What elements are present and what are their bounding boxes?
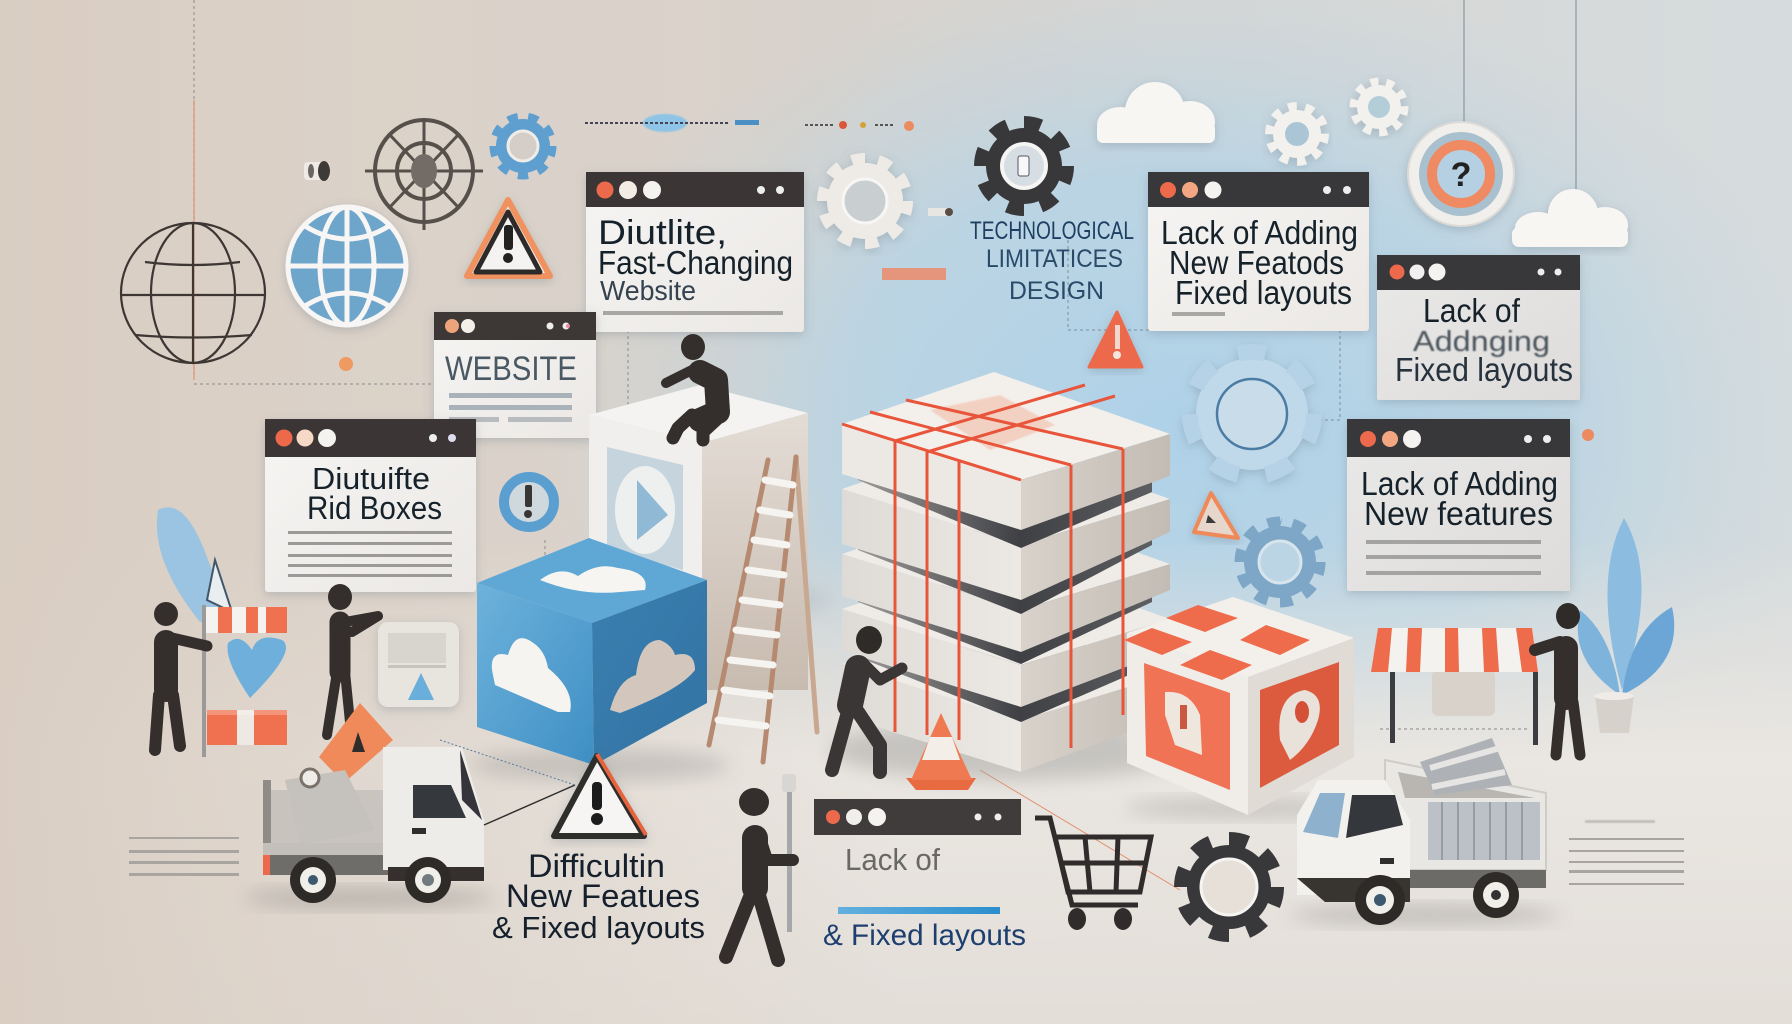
hanging strings — [1464, 0, 1576, 190]
icon: small lock — [304, 161, 330, 181]
window: lack of adding new featods: New Featods — [1169, 244, 1344, 281]
window: lack of bar with fixed layouts — [814, 799, 1026, 952]
heading: technological limitations design: DESIGN — [1009, 277, 1104, 305]
icon: large light blue gear — [1190, 352, 1314, 476]
slab 3 — [842, 502, 1170, 652]
icon: cloud right — [1512, 189, 1628, 247]
strapped stack of slabs — [830, 372, 1190, 780]
window: lack of adding new features: Lack of Adding — [1361, 465, 1558, 502]
window: lack of adding new features — [1347, 419, 1570, 591]
icon: dark gear top — [981, 123, 1067, 209]
figure: pushing the stack — [832, 626, 902, 772]
orange box — [1124, 597, 1355, 818]
slab 1 — [842, 372, 1170, 480]
pole — [202, 605, 206, 757]
window: fast-changing website: Website — [600, 275, 696, 306]
window: lack of adding fixed layouts: Lack of — [1423, 292, 1521, 329]
legend lines right — [1569, 820, 1684, 885]
figure: second worker — [327, 584, 378, 735]
window: lack of bar with fixed layouts: Lack of — [845, 842, 940, 877]
flag: orange white barrier upper — [204, 607, 287, 633]
icon: blue globe — [288, 207, 406, 325]
leaf small blue — [227, 638, 286, 698]
window: lack of adding new featods: Fixed layouts — [1175, 274, 1352, 311]
connector line — [484, 785, 575, 825]
text: difficultin new features fixed layouts — [492, 848, 705, 945]
icon: white gear one — [1270, 107, 1324, 161]
red straps — [842, 385, 1123, 748]
window: lack of adding new featods: Lack of Adding — [1161, 214, 1358, 251]
icon: warning triangle top — [467, 200, 550, 276]
market table — [1371, 628, 1538, 745]
heading: technological limitations design: LIMITATICES — [986, 245, 1123, 273]
window: fast-changing website: Diutlite, — [598, 214, 727, 252]
figure: bottom walker with pole — [726, 774, 796, 960]
window: rid boxes — [265, 419, 476, 592]
icon: grey gear — [823, 159, 907, 243]
figure: flag holder — [154, 602, 207, 750]
window: lack of adding fixed layouts: Fixed layouts — [1395, 351, 1573, 388]
blue cloud cube — [470, 538, 730, 781]
icon: question badge — [1408, 122, 1514, 226]
truck left — [245, 703, 495, 908]
orange dot — [339, 357, 353, 371]
icon: shopping cart — [1035, 818, 1151, 930]
text: difficultin new features fixed layouts: Difficultin — [528, 848, 665, 884]
slab 2 — [842, 437, 1170, 600]
window: lack of adding fixed layouts — [1377, 255, 1580, 400]
small orange marks — [882, 121, 953, 280]
heading: technological limitations design — [970, 217, 1134, 305]
icon: question badge: ? — [1451, 156, 1471, 194]
heading: technological limitations design: TECHNOLOGICAL — [970, 217, 1134, 245]
ladder — [709, 457, 817, 762]
legend lines left — [129, 837, 239, 876]
icon: dark gear bottom — [1181, 839, 1277, 935]
window: lack of adding new features: New features — [1364, 495, 1553, 532]
icon: target wheel — [365, 118, 483, 230]
white video cube — [570, 385, 830, 690]
window: fast-changing website — [586, 172, 804, 332]
window: website: WEBSITE — [445, 350, 577, 388]
window: lack of adding fixed layouts: Addnging — [1413, 326, 1550, 358]
barrier lower — [207, 710, 287, 745]
figure: sitting on cube — [666, 334, 718, 440]
window: website — [434, 312, 596, 438]
icon: cloud top — [1097, 82, 1215, 143]
icon: small warning triangle — [1194, 493, 1238, 538]
icon: warning triangle bottom — [554, 754, 646, 836]
slab 5 — [842, 612, 1170, 772]
top dotted legend strip — [585, 114, 895, 132]
icon: wire globe — [121, 223, 265, 363]
window: rid boxes: Diutuifte — [312, 461, 430, 496]
icon: white gear two — [1354, 82, 1404, 132]
icon: blue alert circle — [504, 477, 554, 527]
leaf left — [157, 507, 234, 622]
right plant — [1578, 518, 1674, 733]
white machine — [378, 622, 459, 707]
window: lack of bar with fixed layouts: & Fixed layouts — [823, 919, 1026, 952]
truck right — [1290, 738, 1560, 925]
icon: orange alert cone — [1089, 312, 1142, 367]
traffic cone — [906, 713, 976, 790]
figure: right worker — [1535, 603, 1580, 755]
window: fast-changing website: Fast-Changing — [598, 244, 793, 281]
text: difficultin new features fixed layouts: New Featues — [506, 878, 700, 914]
slab 4 — [842, 557, 1170, 707]
window: lack of adding new featods — [1148, 172, 1369, 331]
icon: medium blue gear — [1240, 522, 1320, 602]
window: rid boxes: Rid Boxes — [307, 490, 442, 526]
text: difficultin new features fixed layouts: & Fixed layouts — [492, 910, 705, 945]
icon: blue gear — [493, 116, 553, 176]
